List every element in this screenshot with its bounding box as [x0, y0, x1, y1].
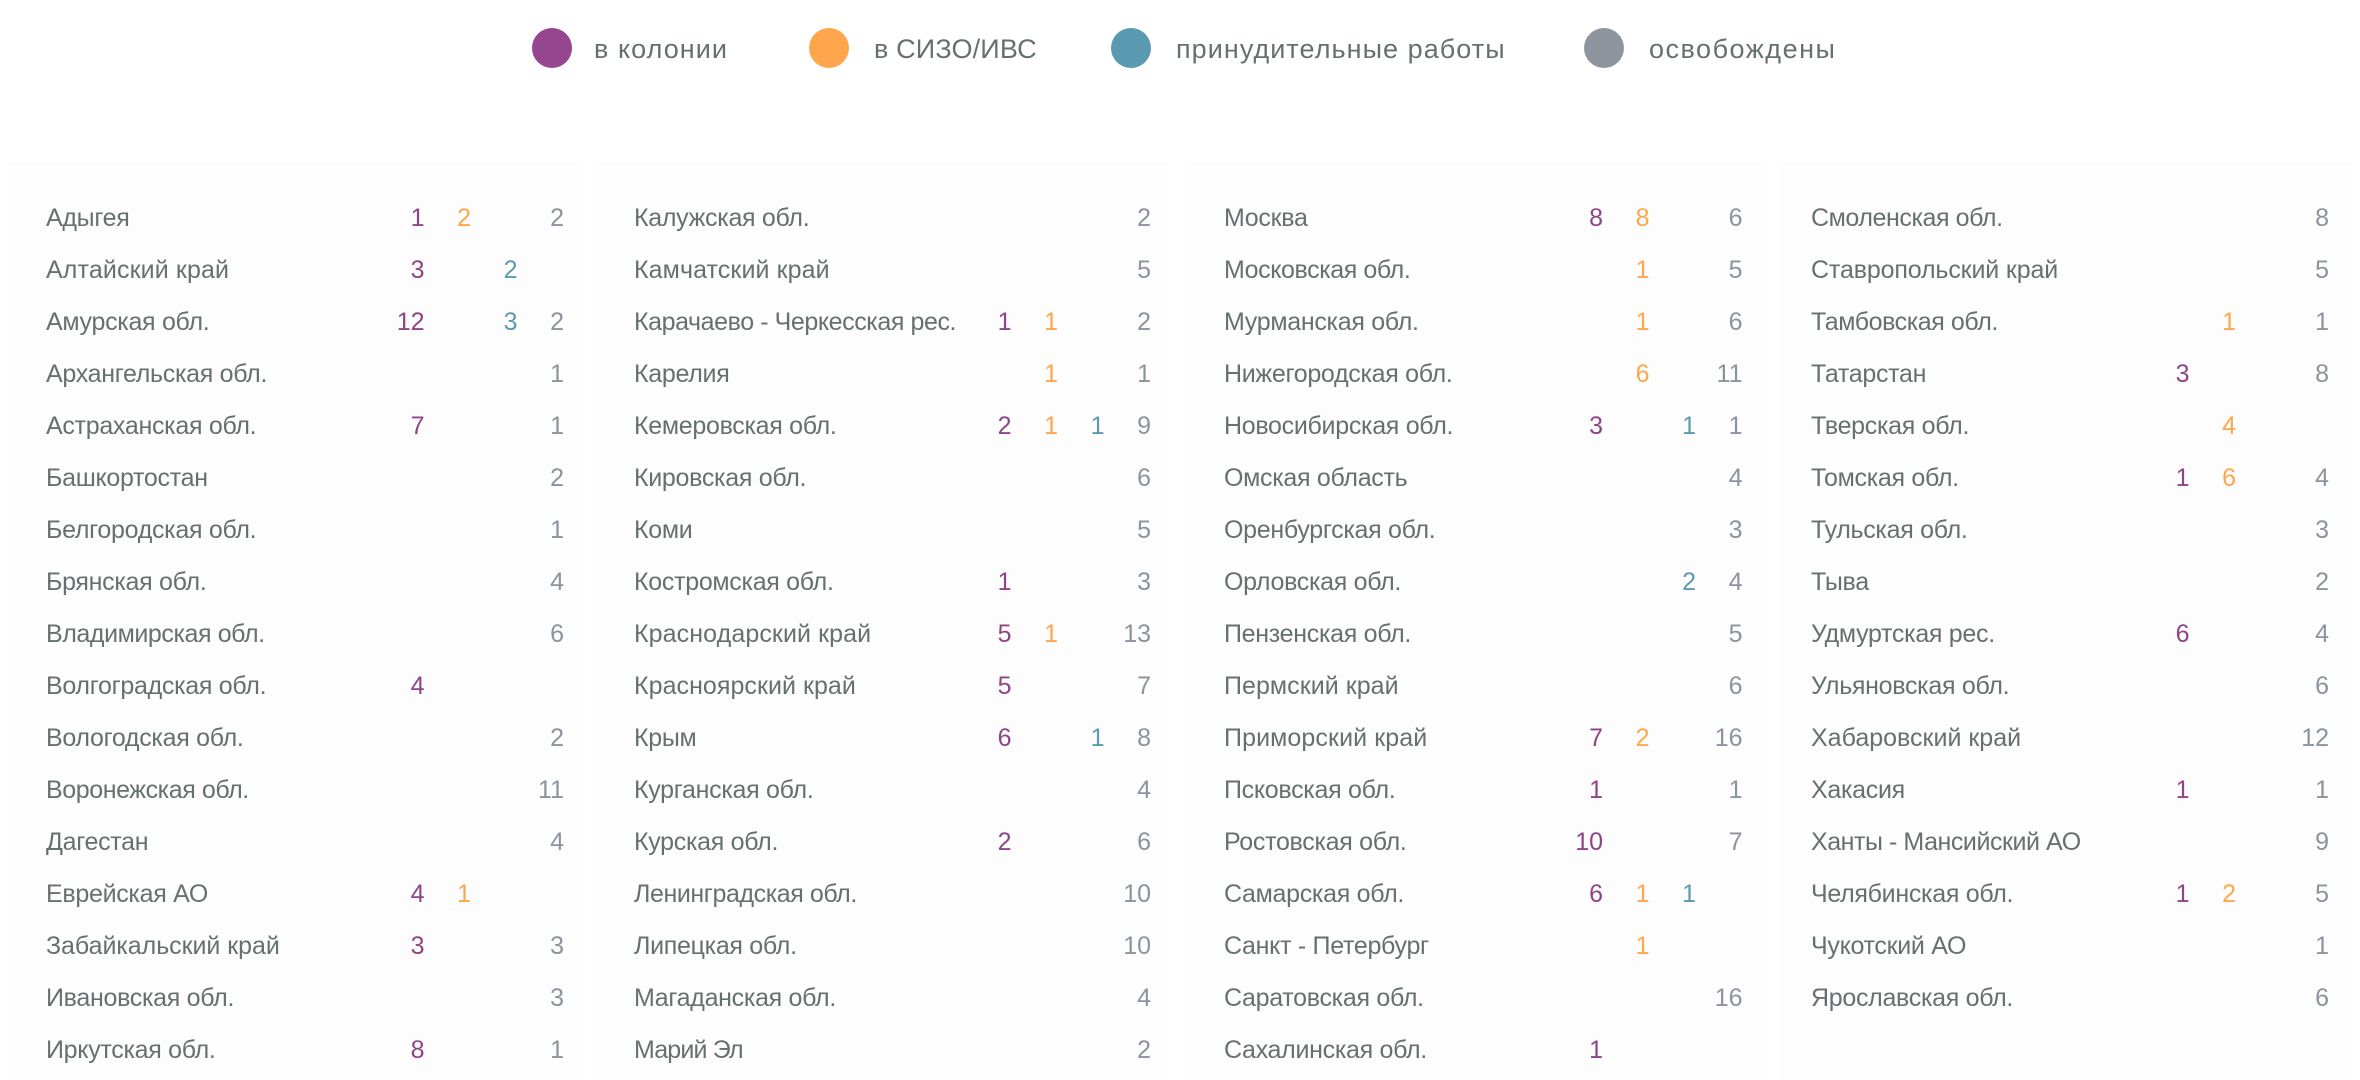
legend item: принудительные работы: принудительные работы [1176, 34, 1506, 64]
row: Тульская обл. [1773, 504, 2344, 556]
row: Краснодарский край [634, 620, 1151, 648]
row: Ульяновская обл.: Ульяновская обл. [1811, 672, 2009, 700]
row: Хакасия: 1 [2176, 776, 2190, 804]
row: Курская обл.: 6 [1137, 828, 1151, 856]
row: Липецкая обл.: 10 [1123, 932, 1151, 960]
row: Новосибирская обл.: 3 [1589, 412, 1603, 440]
row: Башкортостан: 2 [550, 464, 564, 492]
row: Самарская обл.: Самарская обл. [1224, 880, 1404, 908]
row: Нижегородская обл. [1186, 348, 1758, 400]
row: Приморский край: Приморский край [1224, 724, 1427, 752]
row: Воронежская обл.: Воронежская обл. [46, 776, 249, 804]
row: Карачаево - Черкесская рес. [634, 308, 1151, 336]
row: Астраханская обл. [46, 412, 564, 440]
row: Крым: 8 [1137, 724, 1151, 752]
row: Пензенская обл.: Пензенская обл. [1224, 620, 1411, 648]
row: Кировская обл.: 6 [1137, 464, 1151, 492]
row: Ханты - Мансийский АО: Ханты - Мансийский АО [1811, 828, 2081, 856]
row: Еврейская АО: 4 [411, 880, 424, 908]
row: Краснодарский край: 5 [998, 620, 1012, 648]
row: Магаданская обл. [634, 984, 1151, 1012]
row: Пермский край: 6 [1729, 672, 1742, 700]
row: Ивановская обл. [46, 984, 564, 1012]
row: Волгоградская обл.: Волгоградская обл. [46, 672, 266, 700]
row: Карелия: 1 [1137, 360, 1151, 388]
row: Санкт - Петербург: 1 [1636, 932, 1650, 960]
row: Ярославская обл. [1773, 972, 2344, 1024]
row: Белгородская обл.: 1 [550, 516, 564, 544]
row: Камчатский край: Камчатский край [634, 256, 830, 284]
row: Красноярский край: 5 [998, 672, 1012, 700]
row: Саратовская обл.: 16 [1715, 984, 1742, 1012]
row: Москва [1224, 204, 1742, 232]
row: Кемеровская обл.: 1 [1091, 412, 1104, 440]
row: Тверская обл.: 4 [2222, 412, 2236, 440]
row: Пермский край [1186, 660, 1758, 712]
row: Тыва: 2 [2315, 568, 2329, 596]
row: Ставропольский край [1773, 244, 2344, 296]
row: Ростовская обл.: 7 [1729, 828, 1742, 856]
row: Хабаровский край [1773, 712, 2344, 764]
row: Орловская обл.: Орловская обл. [1224, 568, 1401, 596]
row: Хакасия: Хакасия [1811, 776, 1905, 804]
row: Челябинская обл.: 2 [2222, 880, 2236, 908]
row: Еврейская АО: 1 [457, 880, 471, 908]
row: Челябинская обл.: 5 [2315, 880, 2329, 908]
row: Краснодарский край: Краснодарский край [634, 620, 871, 648]
row: Ростовская обл. [1186, 816, 1758, 868]
row: Вологодская обл. [46, 724, 564, 752]
row: Оренбургская обл. [1186, 504, 1758, 556]
row: Забайкальский край: Забайкальский край [46, 932, 280, 960]
row: Адыгея: Адыгея [46, 204, 129, 232]
row: Новосибирская обл.: 1 [1682, 412, 1696, 440]
legend item: в СИЗО/ИВС [809, 28, 1037, 68]
row: Псковская обл.: 1 [1729, 776, 1742, 804]
row: Воронежская обл.: 11 [538, 776, 564, 804]
row: Астраханская обл.: 7 [411, 412, 424, 440]
row: Кемеровская обл.: 9 [1137, 412, 1151, 440]
row: Пензенская обл. [1186, 608, 1758, 660]
row: Крым: 6 [998, 724, 1012, 752]
row: Амурская обл.: Амурская обл. [46, 308, 209, 336]
row: Ярославская обл.: 6 [2315, 984, 2329, 1012]
row: Нижегородская обл.: 11 [1717, 360, 1742, 388]
row: Амурская обл.: 2 [550, 308, 564, 336]
row: Сахалинская обл. [1186, 1024, 1758, 1076]
row: Чукотский АО [1773, 920, 2344, 972]
row: Мурманская обл.: Мурманская обл. [1224, 308, 1419, 336]
row: Воронежская обл. [46, 776, 564, 804]
row: Ленинградская обл.: 10 [1123, 880, 1151, 908]
row: Белгородская обл. [46, 516, 564, 544]
row: Курская обл.: Курская обл. [634, 828, 778, 856]
row: Коми [634, 516, 1151, 544]
row: Забайкальский край: 3 [550, 932, 564, 960]
panel: column 3 [1190, 162, 1762, 1080]
row: Тамбовская обл. [1773, 296, 2344, 348]
row: Брянская обл. [46, 568, 564, 596]
row: Томская обл.: 6 [2222, 464, 2236, 492]
row: Пензенская обл.: 5 [1729, 620, 1742, 648]
row: Московская обл.: 5 [1729, 256, 1742, 284]
row: Удмуртская рес.: 4 [2315, 620, 2329, 648]
row: Марий Эл [634, 1036, 1151, 1064]
row: Санкт - Петербург [1186, 920, 1758, 972]
row: Курганская обл. [634, 776, 1151, 804]
row: Орловская обл.: 2 [1682, 568, 1696, 596]
row: Ставропольский край: Ставропольский край [1811, 256, 2058, 284]
row: Смоленская обл.: Смоленская обл. [1811, 204, 2003, 232]
row: Карачаево - Черкесская рес.: Карачаево - Черкесская рес. [634, 308, 956, 336]
row: Татарстан: 3 [2176, 360, 2190, 388]
row: Амурская обл.: 3 [504, 308, 518, 336]
panel: column 1 [8, 162, 578, 1080]
row: Курганская обл.: Курганская обл. [634, 776, 813, 804]
row: Забайкальский край [46, 932, 564, 960]
row: Башкортостан [46, 464, 564, 492]
row: Вологодская обл.: Вологодская обл. [46, 724, 244, 752]
legend item: в колонии: в колонии [594, 34, 728, 64]
row: Тульская обл.: Тульская обл. [1811, 516, 1968, 544]
row: Амурская обл. [46, 308, 564, 336]
row: Приморский край: 2 [1636, 724, 1650, 752]
row: Чукотский АО: Чукотский АО [1811, 932, 1966, 960]
row: Омская область: Омская область [1224, 464, 1407, 492]
row: Калужская обл. [634, 204, 1151, 232]
row: Ростовская обл.: 10 [1575, 828, 1603, 856]
row: Мурманская обл.: 6 [1729, 308, 1742, 336]
row: Ивановская обл.: 3 [550, 984, 564, 1012]
legend item: освобождены [1584, 28, 1836, 68]
row: Дагестан: 4 [550, 828, 564, 856]
row: Приморский край: 7 [1589, 724, 1603, 752]
row: Карелия [634, 360, 1151, 388]
row: Алтайский край: 2 [504, 256, 518, 284]
row: Челябинская обл.: 1 [2176, 880, 2190, 908]
row: Ульяновская обл. [1773, 660, 2344, 712]
row: Омская область [1186, 452, 1758, 504]
row: Ленинградская обл. [634, 880, 1151, 908]
row: Орловская обл.: 4 [1729, 568, 1742, 596]
row: Смоленская обл.: 8 [2315, 204, 2329, 232]
row: Московская обл. [1186, 244, 1758, 296]
row: Тамбовская обл.: Тамбовская обл. [1811, 308, 1998, 336]
row: Архангельская обл.: 1 [550, 360, 564, 388]
row: Коми: Коми [634, 516, 692, 544]
row: Саратовская обл. [1186, 972, 1758, 1024]
row: Красноярский край: Красноярский край [634, 672, 856, 700]
legend item: принудительные работы [1111, 28, 1506, 68]
row: Челябинская обл. [1773, 868, 2344, 920]
row: Тверская обл. [1773, 400, 2344, 452]
row: Крым: 1 [1091, 724, 1104, 752]
row: Кировская обл.: Кировская обл. [634, 464, 806, 492]
row: Томская обл.: 4 [2315, 464, 2329, 492]
row: Архангельская обл. [46, 360, 564, 388]
row: Еврейская АО: Еврейская АО [46, 880, 208, 908]
row: Курганская обл.: 4 [1137, 776, 1151, 804]
row: Владимирская обл.: 6 [550, 620, 564, 648]
row: Адыгея: 2 [550, 204, 564, 232]
row: Амурская обл.: 12 [397, 308, 424, 336]
row: Тверская обл.: Тверская обл. [1811, 412, 1969, 440]
row: Липецкая обл.: Липецкая обл. [634, 932, 797, 960]
row: Липецкая обл. [634, 932, 1151, 960]
row: Карачаево - Черкесская рес.: 1 [998, 308, 1012, 336]
row: Смоленская обл. [1773, 192, 2344, 244]
row: Иркутская обл.: Иркутская обл. [46, 1036, 216, 1064]
row: Камчатский край: 5 [1137, 256, 1151, 284]
row: Марий Эл: Марий Эл [634, 1036, 743, 1064]
row: Ярославская обл.: Ярославская обл. [1811, 984, 2013, 1012]
row: Дагестан: Дагестан [46, 828, 148, 856]
row: Марий Эл: 2 [1137, 1036, 1151, 1064]
row: Коми: 5 [1137, 516, 1151, 544]
legend item: в СИЗО/ИВС: в СИЗО/ИВС [874, 34, 1037, 64]
row: Владимирская обл. [46, 620, 564, 648]
row: Кемеровская обл.: Кемеровская обл. [634, 412, 837, 440]
row: Самарская обл.: 6 [1589, 880, 1603, 908]
row: Удмуртская рес.: 6 [2176, 620, 2190, 648]
row: Волгоградская обл.: 4 [411, 672, 424, 700]
row: Костромская обл.: Костромская обл. [634, 568, 834, 596]
row: Карачаево - Черкесская рес.: 1 [1044, 308, 1058, 336]
row: Удмуртская рес. [1773, 608, 2344, 660]
row: Пермский край: Пермский край [1224, 672, 1399, 700]
row: Ульяновская обл.: 6 [2315, 672, 2329, 700]
row: Карелия: 1 [1044, 360, 1058, 388]
row: Иркутская обл.: 8 [411, 1036, 424, 1064]
row: Омская область: 4 [1729, 464, 1742, 492]
row: Адыгея [46, 204, 564, 232]
row: Нижегородская обл.: 6 [1636, 360, 1650, 388]
row: Кемеровская обл.: 1 [1044, 412, 1058, 440]
row: Красноярский край: 7 [1137, 672, 1151, 700]
row: Тульская обл.: 3 [2315, 516, 2329, 544]
row: Чукотский АО: 1 [2315, 932, 2329, 960]
row: Брянская обл.: 4 [550, 568, 564, 596]
row: Ивановская обл.: Ивановская обл. [46, 984, 234, 1012]
row: Санкт - Петербург: Санкт - Петербург [1224, 932, 1429, 960]
row: Курская обл.: 2 [998, 828, 1012, 856]
row: Сахалинская обл.: 1 [1589, 1036, 1603, 1064]
row: Ханты - Мансийский АО: 9 [2315, 828, 2329, 856]
row: Калужская обл.: Калужская обл. [634, 204, 809, 232]
row: Татарстан [1773, 348, 2344, 400]
row: Волгоградская обл. [46, 672, 424, 700]
row: Ханты - Мансийский АО [1773, 816, 2344, 868]
row: Костромская обл.: 3 [1137, 568, 1151, 596]
legend item: освобождены: освобождены [1649, 34, 1836, 64]
row: Кемеровская обл. [634, 412, 1151, 440]
row: Москва: 8 [1589, 204, 1603, 232]
row: Ростовская обл.: Ростовская обл. [1224, 828, 1407, 856]
row: Москва: 6 [1729, 204, 1742, 232]
row: Калужская обл.: 2 [1137, 204, 1151, 232]
row: Новосибирская обл.: Новосибирская обл. [1224, 412, 1453, 440]
row: Тамбовская обл.: 1 [2222, 308, 2236, 336]
row: Архангельская обл.: Архангельская обл. [46, 360, 267, 388]
row: Удмуртская рес.: Удмуртская рес. [1811, 620, 1995, 648]
row: Забайкальский край: 3 [411, 932, 424, 960]
row: Магаданская обл.: Магаданская обл. [634, 984, 836, 1012]
row: Брянская обл.: Брянская обл. [46, 568, 206, 596]
row: Крым: Крым [634, 724, 696, 752]
row: Астраханская обл.: Астраханская обл. [46, 412, 256, 440]
row: Алтайский край: Алтайский край [46, 256, 229, 284]
row: Кировская обл. [634, 464, 1151, 492]
row: Тыва [1773, 556, 2344, 608]
panel: column 2 [599, 162, 1168, 1080]
row: Сахалинская обл.: Сахалинская обл. [1224, 1036, 1427, 1064]
row: Хакасия [1773, 764, 2344, 816]
row: Мурманская обл.: 1 [1636, 308, 1650, 336]
row: Костромская обл.: 1 [998, 568, 1012, 596]
row: Адыгея: 1 [411, 204, 424, 232]
row: Вологодская обл.: 2 [550, 724, 564, 752]
row: Белгородская обл.: Белгородская обл. [46, 516, 256, 544]
row: Орловская обл. [1186, 556, 1758, 608]
row: Краснодарский край: 1 [1044, 620, 1058, 648]
row: Владимирская обл.: Владимирская обл. [46, 620, 265, 648]
row: Ставропольский край: 5 [2315, 256, 2329, 284]
row: Томская обл.: Томская обл. [1811, 464, 1959, 492]
row: Мурманская обл. [1186, 296, 1758, 348]
row: Томская обл. [1773, 452, 2344, 504]
panel: column 4 [1781, 162, 2352, 1080]
row: Карелия: Карелия [634, 360, 729, 388]
row: Башкортостан: Башкортостан [46, 464, 208, 492]
row: Приморский край: 16 [1715, 724, 1742, 752]
row: Костромская обл. [634, 568, 1151, 596]
row: Томская обл.: 1 [2176, 464, 2190, 492]
row: Московская обл.: 1 [1636, 256, 1650, 284]
row: Краснодарский край: 13 [1123, 620, 1151, 648]
row: Астраханская обл.: 1 [550, 412, 564, 440]
legend item: в колонии [532, 28, 728, 68]
row: Псковская обл. [1186, 764, 1758, 816]
row: Москва: 8 [1636, 204, 1650, 232]
row: Тамбовская обл.: 1 [2315, 308, 2329, 336]
row: Хакасия: 1 [2315, 776, 2329, 804]
row: Псковская обл.: 1 [1589, 776, 1603, 804]
row: Дагестан [46, 828, 564, 856]
row: Татарстан: 8 [2315, 360, 2329, 388]
row: Иркутская обл. [46, 1036, 564, 1064]
row: Оренбургская обл.: Оренбургская обл. [1224, 516, 1435, 544]
row: Алтайский край [46, 256, 518, 284]
row: Татарстан: Татарстан [1811, 360, 1926, 388]
row: Ленинградская обл.: Ленинградская обл. [634, 880, 857, 908]
row: Саратовская обл.: Саратовская обл. [1224, 984, 1424, 1012]
row: Магаданская обл.: 4 [1137, 984, 1151, 1012]
row: Приморский край [1186, 712, 1758, 764]
row: Кемеровская обл.: 2 [998, 412, 1012, 440]
row: Нижегородская обл.: Нижегородская обл. [1224, 360, 1453, 388]
row: Иркутская обл.: 1 [550, 1036, 564, 1064]
row: Камчатский край [634, 256, 1151, 284]
row: Новосибирская обл. [1186, 400, 1758, 452]
row: Челябинская обл.: Челябинская обл. [1811, 880, 2013, 908]
row: Оренбургская обл.: 3 [1729, 516, 1742, 544]
row: Псковская обл.: Псковская обл. [1224, 776, 1395, 804]
row: Адыгея: 2 [457, 204, 471, 232]
row: Красноярский край [634, 672, 1151, 700]
row: Московская обл.: Московская обл. [1224, 256, 1410, 284]
row: Самарская обл.: 1 [1636, 880, 1650, 908]
row: Курская обл. [634, 828, 1151, 856]
row: Крым [634, 724, 1151, 752]
row: Москва: Москва [1224, 204, 1308, 232]
row: Тыва: Тыва [1811, 568, 1869, 596]
row: Еврейская АО [46, 880, 471, 908]
legend [532, 28, 1836, 68]
row: Алтайский край: 3 [411, 256, 424, 284]
row: Хабаровский край: Хабаровский край [1811, 724, 2021, 752]
row: Карачаево - Черкесская рес.: 2 [1137, 308, 1151, 336]
row: Хабаровский край: 12 [2301, 724, 2329, 752]
row: Новосибирская обл.: 1 [1729, 412, 1742, 440]
row: Самарская обл. [1186, 868, 1758, 920]
row: Самарская обл.: 1 [1682, 880, 1696, 908]
